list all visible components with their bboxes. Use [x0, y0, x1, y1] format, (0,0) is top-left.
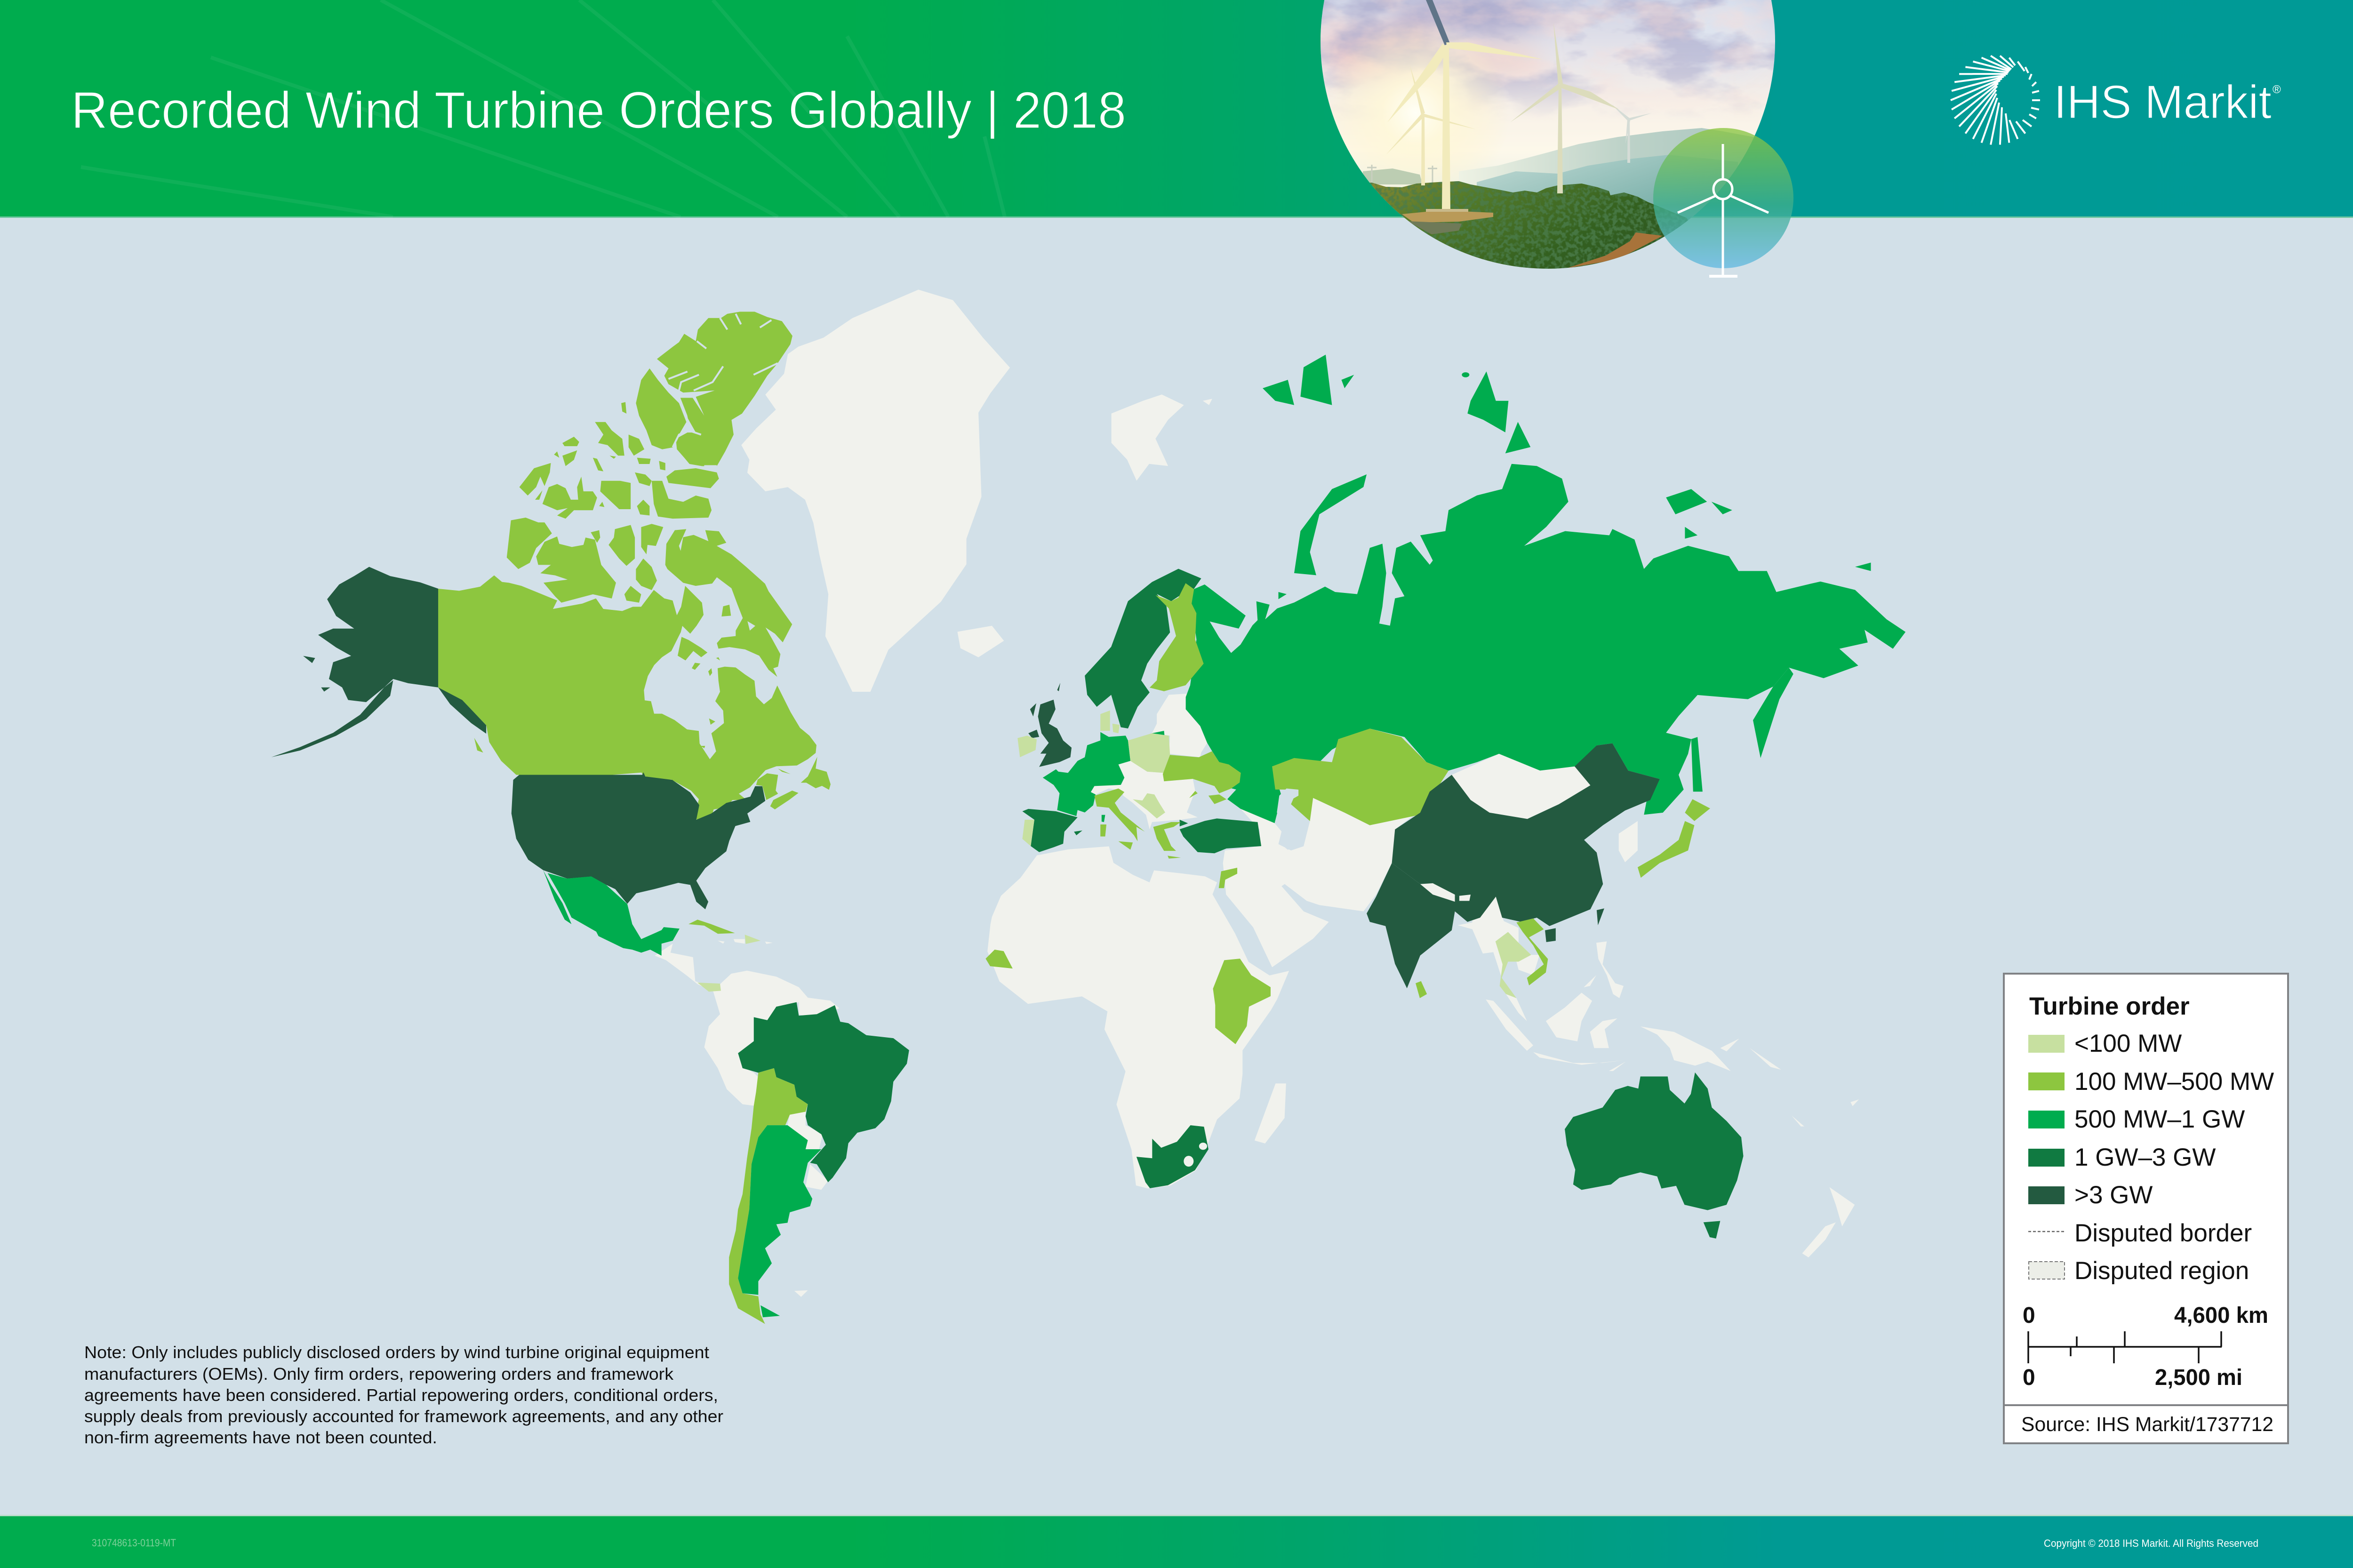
legend item: over 3 GW: >3 GW	[2074, 1181, 2153, 1209]
land: Iceland and Svalbard	[957, 394, 1212, 657]
legend item: under 100 MW	[2028, 1030, 2182, 1057]
land: Europe remaining countries	[1091, 694, 1207, 829]
forest hillside	[1369, 181, 1688, 269]
icon: wind turbine badge	[1653, 128, 1793, 278]
icon: sunburst logo mark	[1951, 56, 2040, 145]
land: Nepal, Bhutan and Korea	[1420, 821, 1638, 902]
country: Japan	[1638, 799, 1710, 878]
countries: Thailand, Vietnam and Sri Lanka	[1416, 919, 1548, 998]
note text: agreements have been considered. Partial repowering orders, conditional orders,	[84, 1385, 718, 1405]
footer band	[0, 1515, 2353, 1568]
legend item: disputed border: Disputed border	[2074, 1219, 2252, 1247]
legend item: disputed region: Disputed region	[2074, 1257, 2249, 1285]
land: Latin America	[655, 939, 840, 1297]
photo: wind turbines over mountains	[1313, 0, 1788, 282]
country: Brazil	[738, 1002, 909, 1182]
country: Russia	[1186, 355, 1905, 823]
registered mark: ®	[2273, 83, 2281, 96]
Canadian Arctic islands	[507, 312, 792, 603]
country: Canada	[438, 312, 831, 820]
header band	[0, 0, 2353, 218]
country: Bolivia and Chile	[729, 1068, 808, 1324]
scale bar: 0	[2023, 1365, 2035, 1390]
country: Norway and Sweden	[1085, 569, 1201, 728]
water: Caspian Sea	[1277, 789, 1305, 850]
land: Mongolia	[1452, 754, 1593, 819]
legend heading: Turbine order	[2029, 992, 2190, 1020]
country: United Kingdom	[1028, 683, 1072, 767]
land: Africa	[987, 846, 1289, 1189]
legend item: over 3 GW	[2028, 1181, 2153, 1209]
scale bar	[2023, 1303, 2268, 1390]
note text: non-firm agreements have not been counted.	[84, 1428, 437, 1447]
world map	[272, 289, 1905, 1324]
scale bar: 2,500 mi	[2155, 1365, 2242, 1390]
country: Argentina	[738, 1125, 826, 1317]
legend item: 1 to 3 GW: 1 GW–3 GW	[2074, 1144, 2216, 1171]
source line: Source: IHS Markit/1737712	[2021, 1413, 2273, 1436]
note text: manufacturers (OEMs). Only firm orders, repowering orders and framework	[84, 1364, 674, 1384]
title: Recorded Wind Turbine Orders Globally | 2018	[71, 81, 1126, 139]
country: Mexico and Caribbean	[543, 870, 760, 992]
land: Southeast Asia and Oceania	[1457, 889, 1859, 1257]
logo: IHS Markit	[1951, 56, 2281, 145]
legend panel	[2004, 974, 2288, 1443]
land: Greenland	[741, 289, 1010, 692]
country: South Africa	[1136, 1125, 1209, 1188]
pylons	[1367, 165, 1437, 184]
legend item: 500 MW to 1 GW: 500 MW–1 GW	[2074, 1105, 2245, 1133]
note text: supply deals from previously accounted for framework agreements, and any other	[84, 1407, 723, 1426]
country: Kazakhstan	[1272, 728, 1449, 825]
copyright: Copyright © 2018 IHS Markit. All Rights Reserved	[2044, 1537, 2258, 1549]
Canada mainland, Hudson Bay and Atlantic provinces	[438, 529, 831, 820]
countries: Senegal and Ethiopia-Kenya	[985, 950, 1271, 1044]
scale bar: 4,600 km	[2174, 1303, 2268, 1328]
logo wordmark: IHS Markit	[2054, 76, 2272, 128]
countries: France, Germany and Benelux	[1043, 731, 1164, 822]
legend item: 100 to 500 MW: 100 MW–500 MW	[2074, 1068, 2274, 1096]
far mountains	[1459, 128, 1753, 182]
countries: Spain and Turkey	[1022, 809, 1261, 853]
countries: China and India	[1367, 744, 1660, 988]
note text: Note: Only includes publicly disclosed orders by wind turbine original equipment	[84, 1343, 709, 1362]
countries: Ireland, Denmark, Portugal, Poland, Bosnia-Serbia	[1017, 711, 1170, 846]
scale bar: 0	[2023, 1303, 2035, 1328]
countries: Ukraine, Italy, Greece, Jordan	[1095, 751, 1241, 888]
country: Australia	[1565, 1072, 1744, 1239]
legend item: under 100 MW: <100 MW	[2074, 1030, 2182, 1057]
country: United States	[272, 567, 765, 909]
turbines	[1386, 0, 1652, 212]
country: Finland	[1150, 583, 1204, 691]
land: Middle East and Central Asia	[1223, 798, 1417, 967]
note text	[84, 1343, 723, 1447]
job number: 310748613-0119-MT	[92, 1537, 176, 1549]
